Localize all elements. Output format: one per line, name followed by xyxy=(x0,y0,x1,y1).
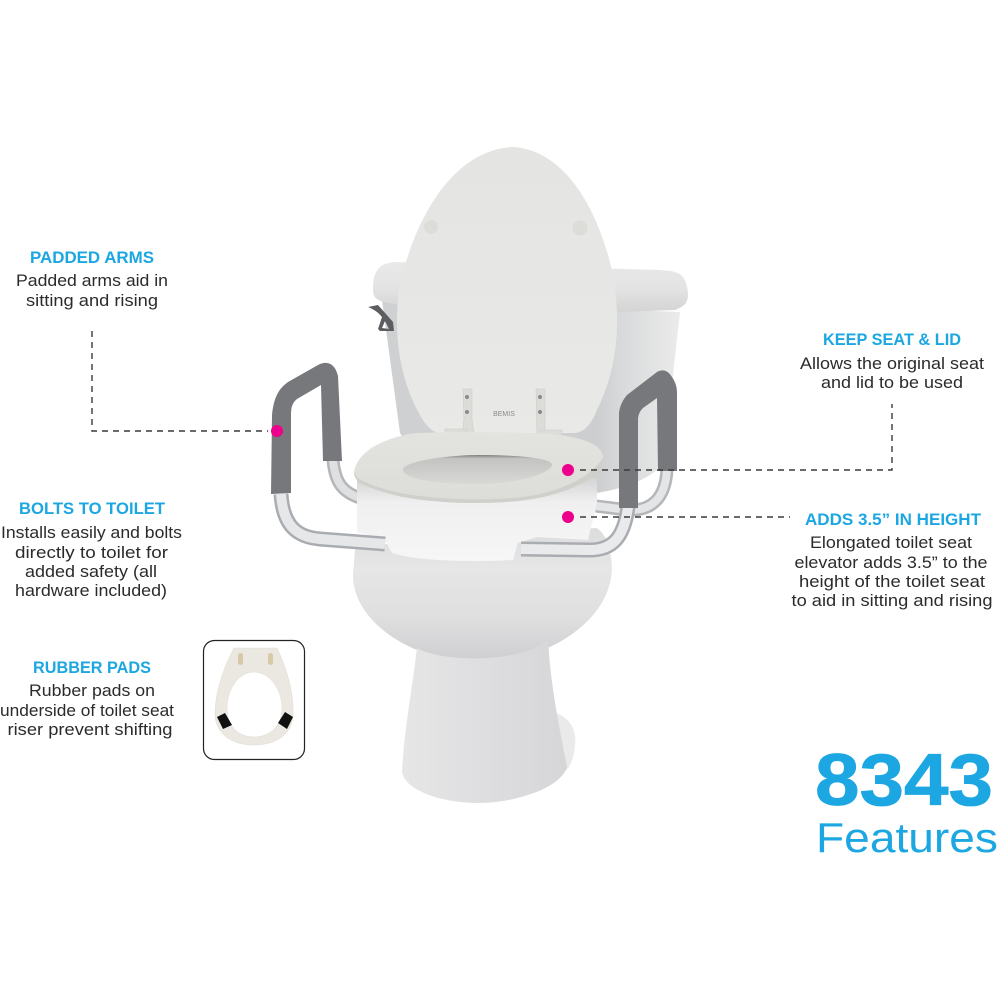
raised toilet lid xyxy=(397,147,617,435)
leader line: adds height xyxy=(580,516,790,518)
right padded arm xyxy=(619,370,677,508)
callout: keep seat and lid xyxy=(800,331,984,392)
callout: rubber pads: Rubber pads on xyxy=(29,681,155,700)
callout: adds height: Elongated toilet seat xyxy=(810,533,972,552)
callout: bolts to toilet xyxy=(1,500,182,600)
brand mark: BEMIS xyxy=(493,411,515,418)
seat xyxy=(354,432,603,503)
riser underside xyxy=(215,648,293,745)
callout: bolts to toilet: hardware included) xyxy=(15,581,167,600)
callout: bolts to toilet: added safety (all xyxy=(25,562,157,581)
toilet bowl xyxy=(353,528,612,660)
callout: rubber pads: underside of toilet seat xyxy=(0,701,174,720)
callout: bolts to toilet: directly to toilet for xyxy=(15,543,168,562)
riser xyxy=(357,478,597,561)
marker: padded arms xyxy=(271,425,283,437)
callout: rubber pads: RUBBER PADS xyxy=(33,659,151,677)
model number: 8343 xyxy=(815,740,993,821)
left padded arm xyxy=(271,363,342,494)
mounting slots xyxy=(238,653,273,665)
marker: adds height xyxy=(562,511,574,523)
callout: rubber pads xyxy=(0,659,174,739)
aluminium arm tubes xyxy=(281,494,628,550)
callout: padded arms: sitting and rising xyxy=(26,291,158,310)
back arm tubes xyxy=(333,460,667,510)
inset: rubber pads underside xyxy=(204,640,304,760)
callout: keep seat and lid: KEEP SEAT & LID xyxy=(823,331,961,349)
rubber pads xyxy=(217,712,293,729)
callout: adds height: ADDS 3.5” IN HEIGHT xyxy=(805,511,981,529)
callout: adds height: height of the toilet seat xyxy=(799,572,985,591)
product photo: raised toilet seat on toilet xyxy=(271,147,688,803)
features heading: Features xyxy=(816,814,998,861)
callout: adds height: elevator adds 3.5” to the xyxy=(794,553,988,572)
callout: adds height xyxy=(792,511,992,610)
callout: rubber pads: riser prevent shifting xyxy=(8,720,172,739)
callout: bolts to toilet: Installs easily and bolts xyxy=(1,523,182,542)
callout: padded arms: Padded arms aid in xyxy=(16,271,168,290)
callout: padded arms xyxy=(16,249,168,310)
lid hinges xyxy=(445,389,562,435)
callout: keep seat and lid: Allows the original seat xyxy=(800,354,984,373)
marker: keep seat and lid xyxy=(562,464,574,476)
callout: keep seat and lid: and lid to be used xyxy=(821,373,963,392)
callout: padded arms: PADDED ARMS xyxy=(30,249,154,267)
leader line: keep seat and lid xyxy=(580,404,892,470)
flush handle xyxy=(368,305,394,331)
callout: adds height: to aid in sitting and rising xyxy=(792,591,992,610)
toilet tank xyxy=(373,262,688,500)
pedestal xyxy=(402,640,575,803)
callout: bolts to toilet: BOLTS TO TOILET xyxy=(19,500,165,518)
leader line: padded arms xyxy=(92,331,268,431)
